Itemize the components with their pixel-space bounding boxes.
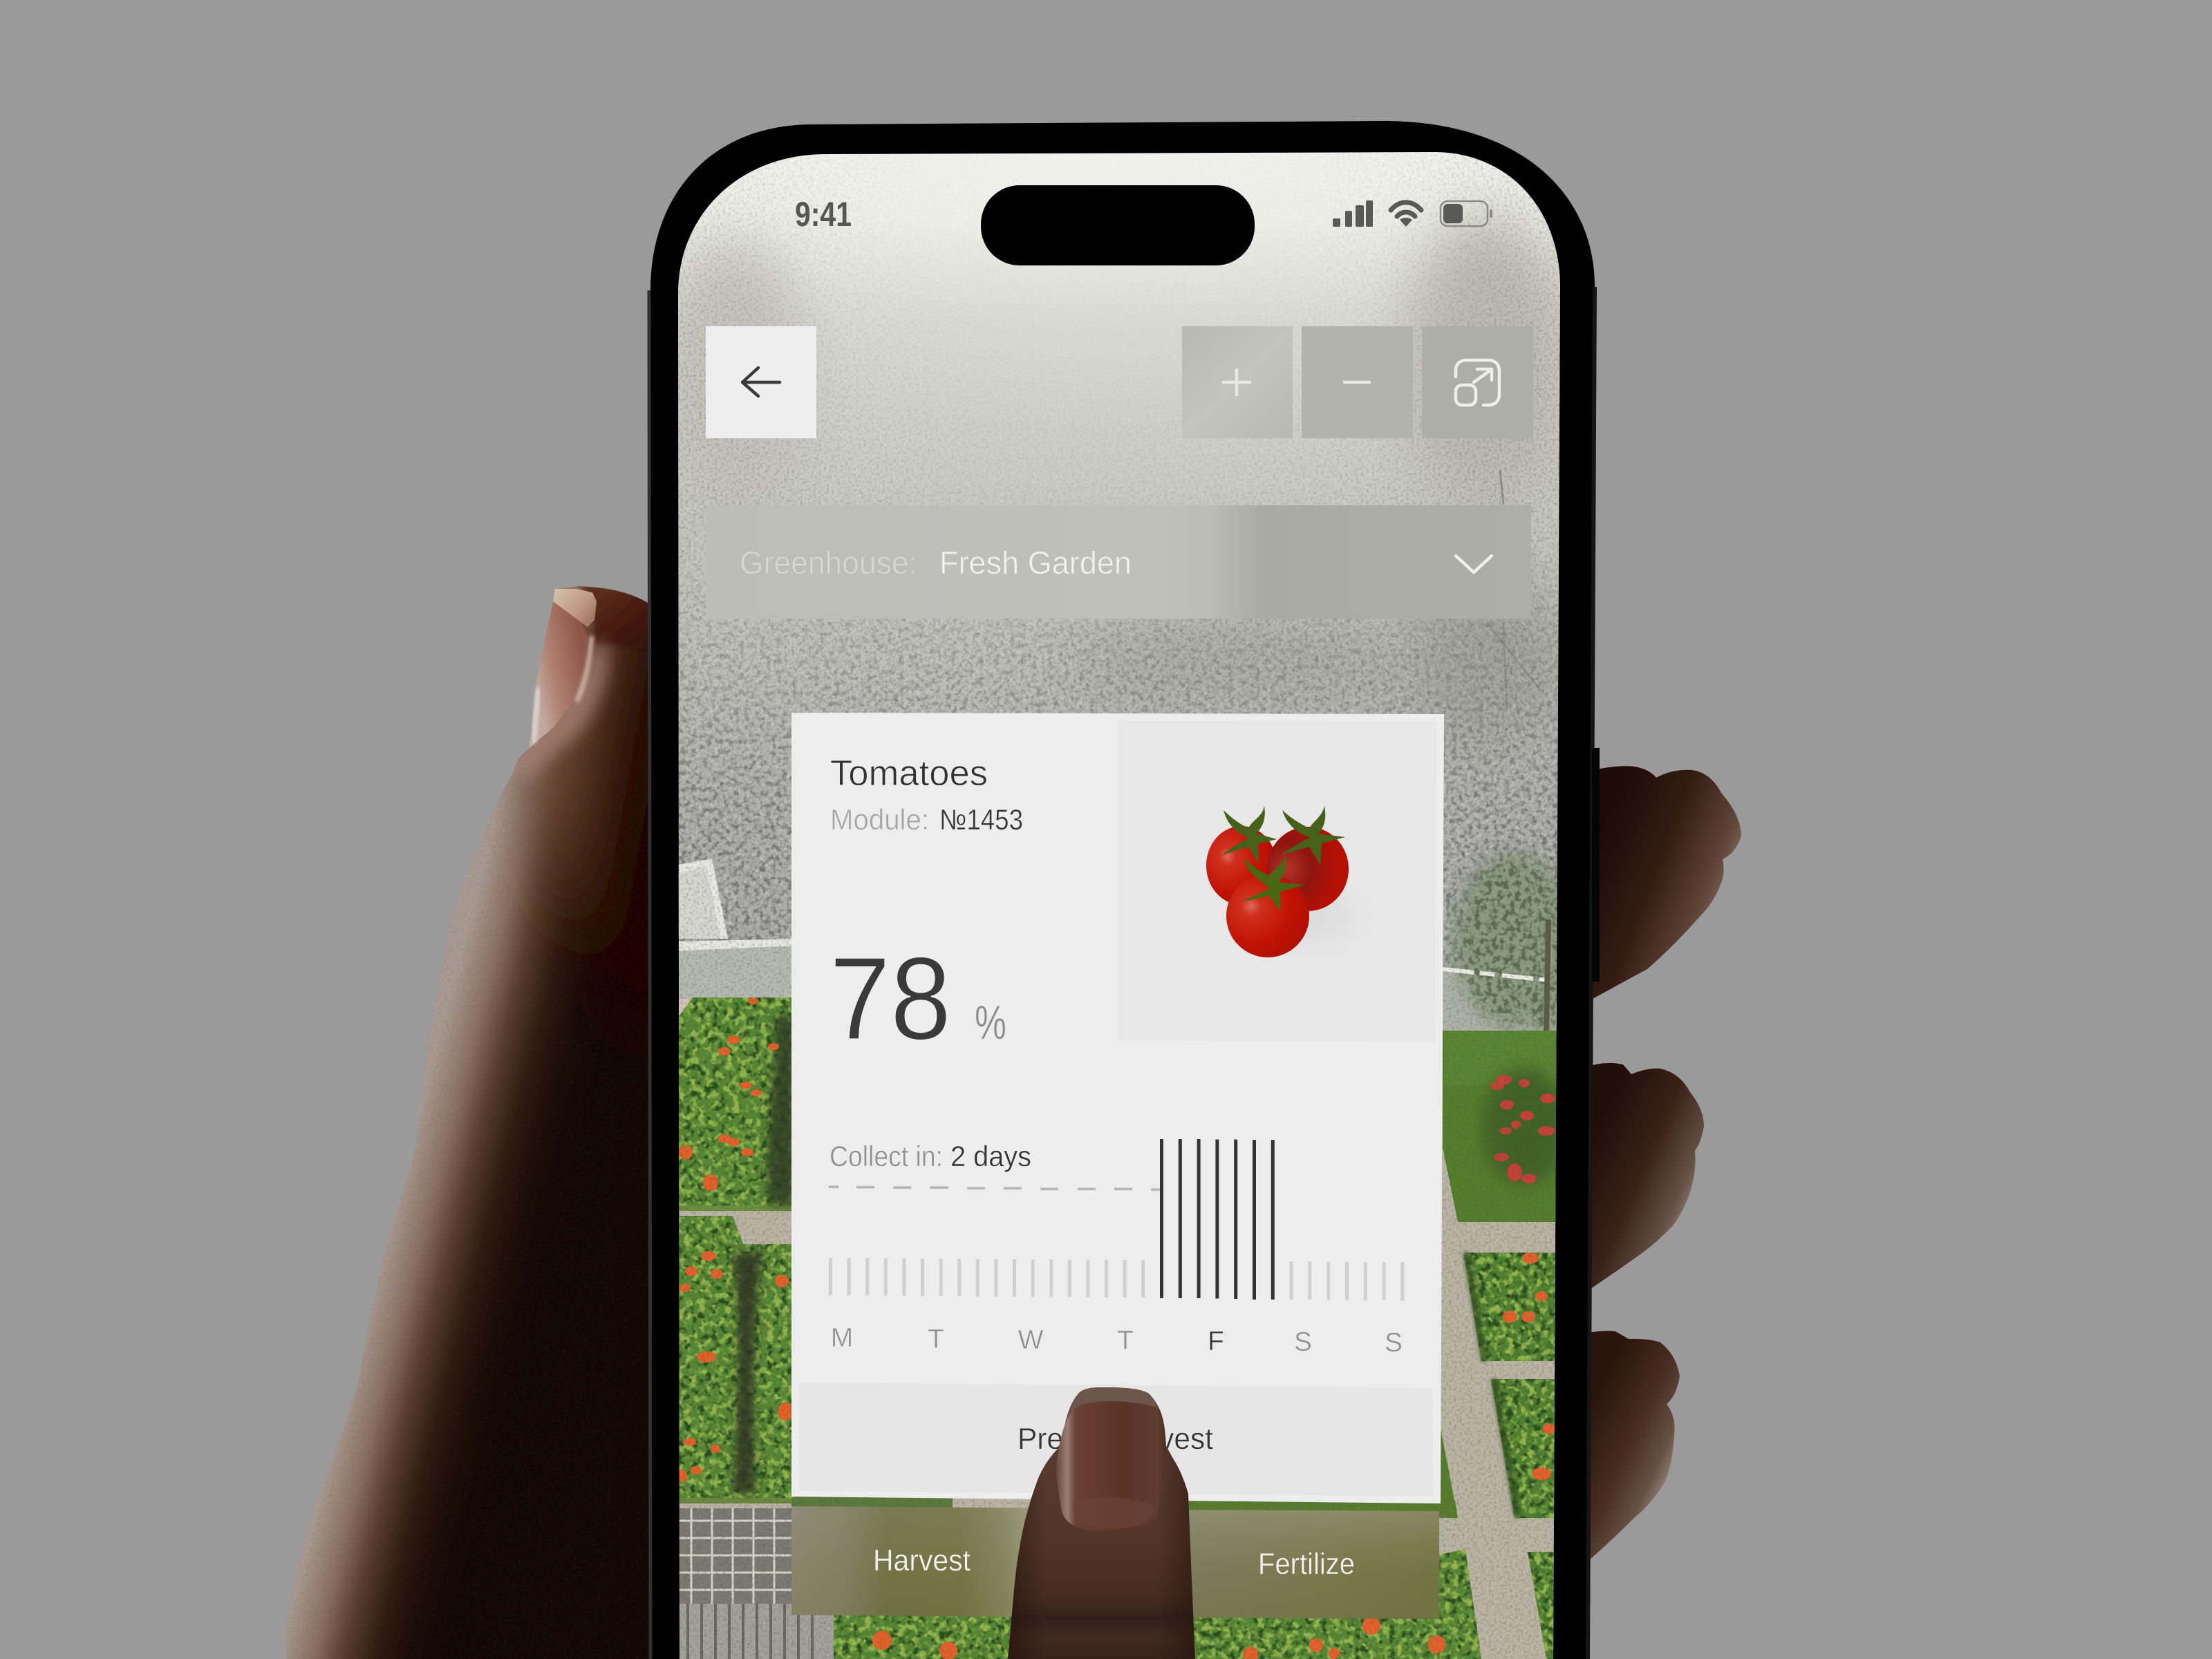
expand button (1422, 326, 1533, 438)
foggy sky and trees (660, 149, 1569, 1047)
finger: middle (1583, 1063, 1704, 1294)
harvest button (791, 1506, 1078, 1618)
fertilize button: Fertilize (1258, 1547, 1355, 1581)
right fingers (1583, 766, 1741, 1566)
fingernail (1056, 1387, 1166, 1532)
greenhouse dropdown (706, 505, 1531, 619)
left hand and thumb (276, 586, 677, 1659)
grass and beds (674, 997, 1567, 1659)
icon: minus (1343, 381, 1371, 384)
red flowers on lawn (1490, 1075, 1555, 1183)
icon: battery (1441, 201, 1492, 226)
weekday labels: T (1117, 1326, 1134, 1356)
grey bars before (829, 1258, 1145, 1297)
percent value: 78 (830, 933, 951, 1065)
weekday labels: T (928, 1324, 944, 1354)
threshold dashed line (829, 1187, 1161, 1190)
icon: plus (1222, 368, 1251, 396)
icon: wifi (1391, 203, 1421, 227)
value: Fresh Garden (939, 545, 1132, 581)
dark bars (1160, 1139, 1275, 1300)
dynamic island (981, 185, 1255, 265)
right wall and tree (1443, 845, 1557, 1031)
greenhouse trellis (674, 1508, 834, 1659)
weekday labels: F (1208, 1327, 1224, 1356)
foliage texture (674, 995, 1566, 1659)
icon: back arrow (742, 368, 780, 396)
left white structure (674, 859, 798, 997)
percent sign: % (975, 995, 1006, 1049)
side button (1592, 748, 1600, 982)
fine grain texture (674, 149, 1566, 1659)
ground paths (674, 995, 1566, 1659)
finger: upper (1586, 766, 1741, 1002)
icon: signal (1333, 200, 1373, 227)
module label: Module: (830, 803, 929, 836)
collect value: 2 days (950, 1140, 1031, 1172)
crop image panel (1118, 721, 1436, 1042)
pointing finger (1008, 1387, 1195, 1659)
zoom out button (1302, 326, 1413, 438)
harvest button: Harvest (873, 1544, 971, 1577)
status bar (795, 185, 1492, 265)
back button (706, 326, 816, 438)
weekday labels: M (831, 1323, 853, 1353)
icon: tomatoes (1206, 806, 1349, 957)
crop card (791, 713, 1444, 1503)
weekday labels: W (1018, 1325, 1044, 1355)
weekday labels: S (1385, 1328, 1403, 1358)
screen: garden photo (660, 149, 1576, 1659)
crop name: Tomatoes (830, 753, 988, 794)
icon: chevron (1456, 556, 1492, 572)
coarse fog mottling (679, 524, 1559, 969)
module number: №1453 (939, 803, 1023, 836)
weekday labels (831, 1323, 1403, 1358)
icon: expand (1456, 360, 1499, 405)
time: 9:41 (795, 195, 852, 234)
finger: lower (1583, 1331, 1680, 1566)
collect label: Collect in: (830, 1140, 943, 1172)
pre-harvest button: Predict harvest (1018, 1422, 1213, 1456)
bar chart (829, 1139, 1404, 1301)
phone body (649, 121, 1600, 1659)
label: Greenhouse: (740, 545, 917, 581)
fertilize button (1147, 1510, 1439, 1619)
zoom in button (1182, 326, 1293, 438)
garden tomatoes (677, 997, 1555, 1659)
dark furrows (733, 1016, 1521, 1518)
thumb nail (529, 589, 597, 749)
weekday labels: S (1294, 1327, 1312, 1357)
pre-harvest button (799, 1382, 1433, 1497)
grey bars after (1290, 1262, 1404, 1301)
